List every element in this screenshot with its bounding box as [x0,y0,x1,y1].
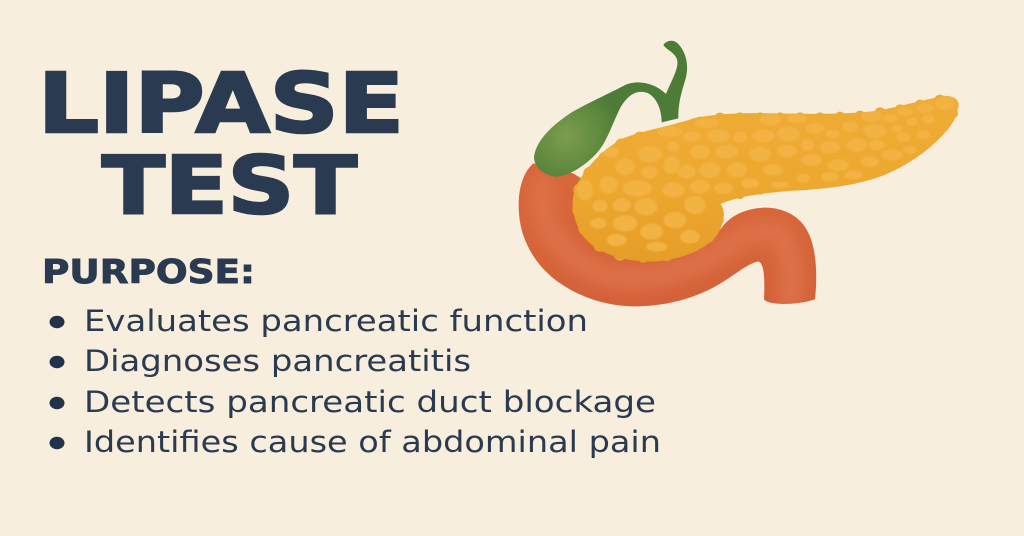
bullet item: diagnoses pancreatitis: Diagnoses pancreatitis [84,344,471,378]
bullet item: identifies cause of abdominal pain: Identifies cause of abdominal pain [84,425,661,459]
gallbladder and bile duct [534,41,687,177]
purpose bullet list [50,304,661,459]
title: LIPASE TEST: TEST [102,140,357,232]
duodenum [519,163,816,306]
pancreas [572,95,959,263]
bullet item: detects pancreatic duct blockage: Detects pancreatic duct blockage [84,385,656,419]
illustration: pancreas, gallbladder and duodenum [519,41,959,306]
title: LIPASE TEST [38,57,404,232]
title: LIPASE TEST: LIPASE [38,57,404,152]
heading: purpose: PURPOSE: [42,252,255,291]
bullet item: evaluates pancreatic function: Evaluates pancreatic function [84,304,588,338]
pancreas lobed outline [572,95,958,263]
